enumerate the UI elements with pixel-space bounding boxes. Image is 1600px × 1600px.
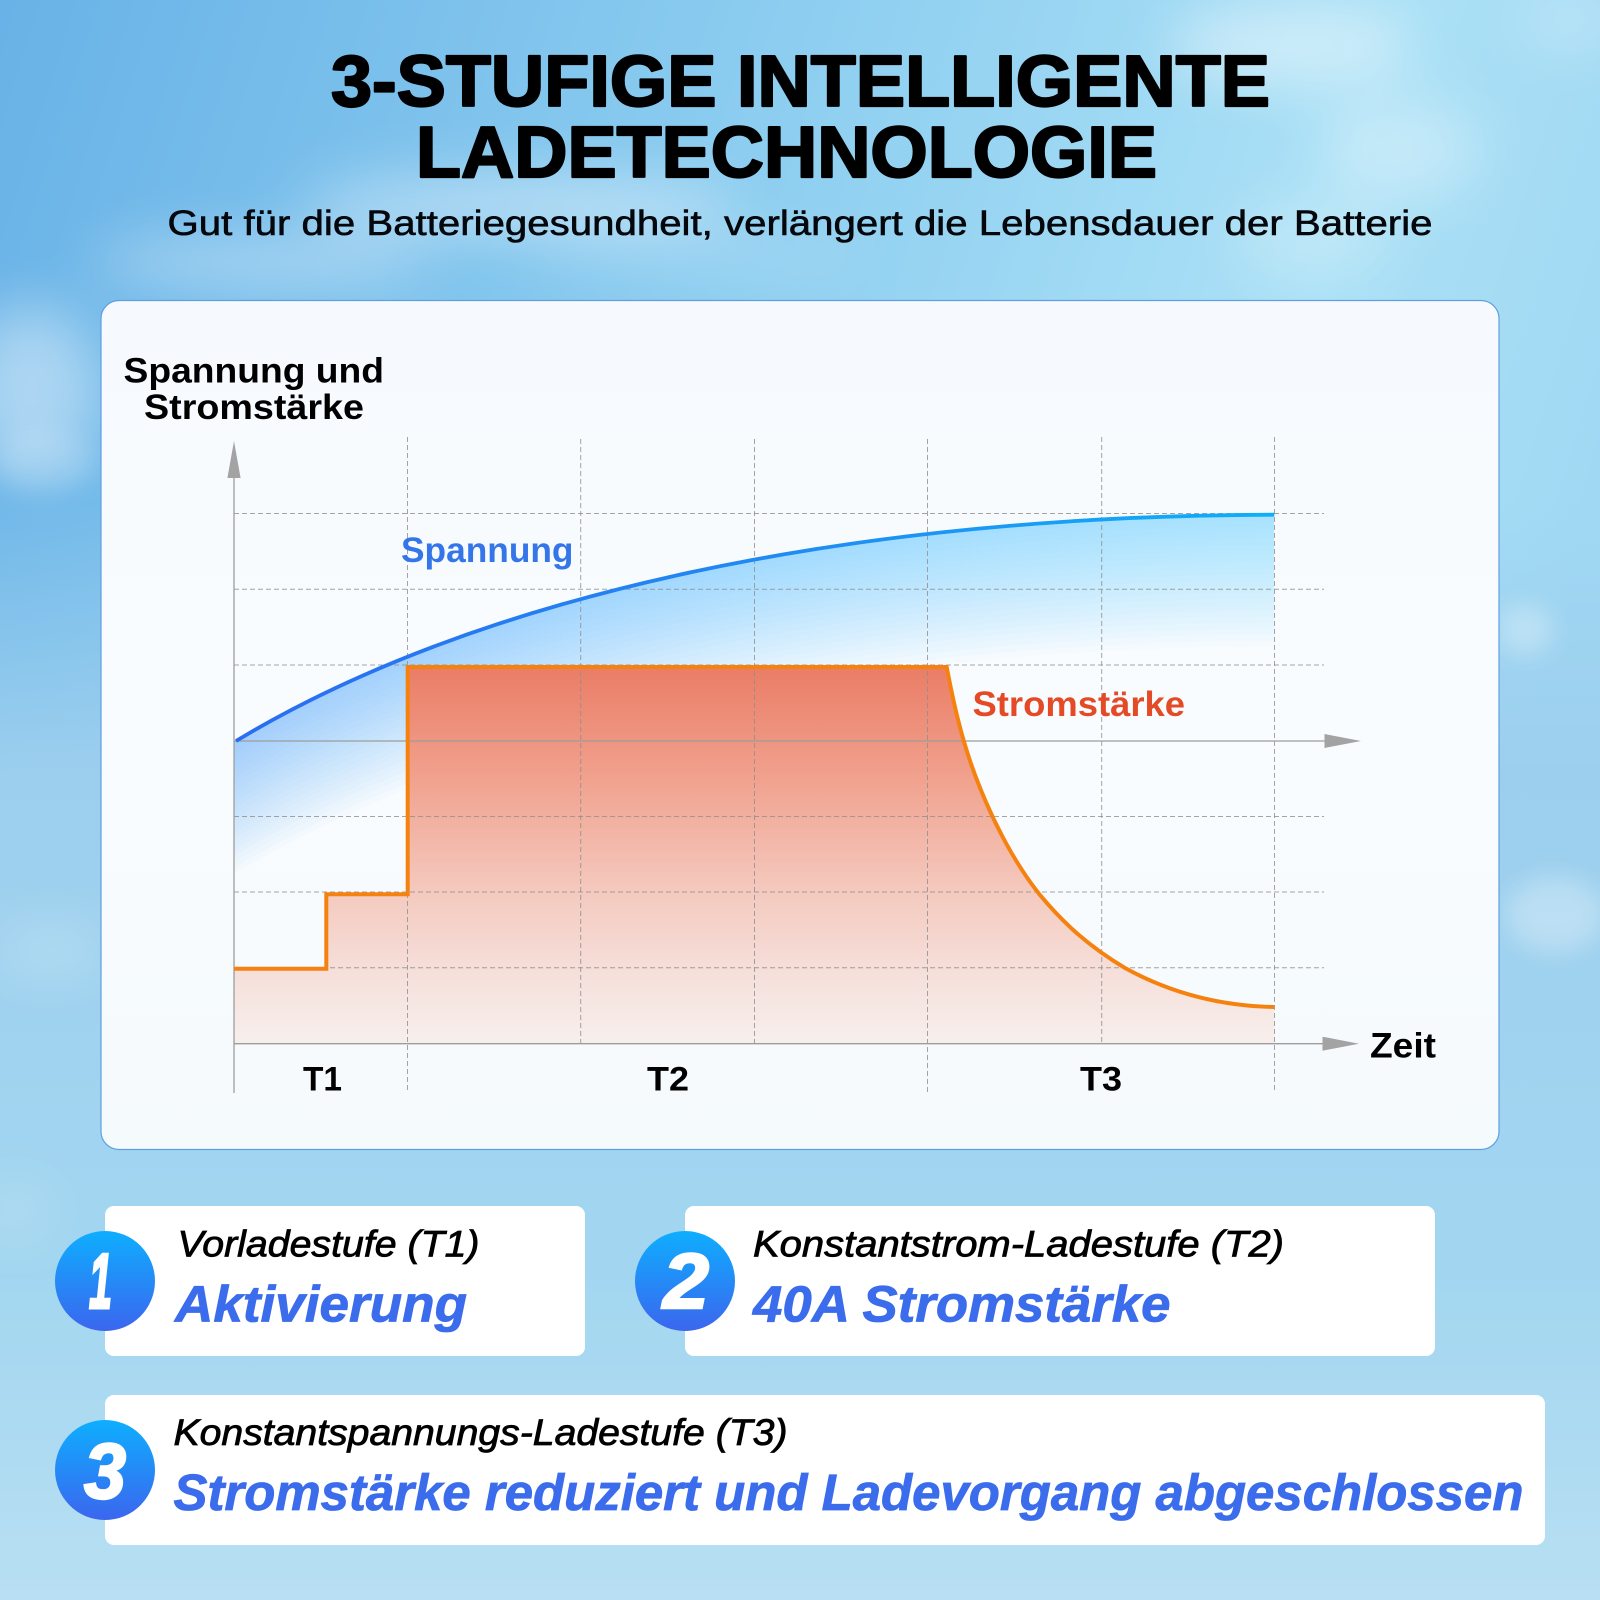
- title: 3-STUFIGE INTELLIGENTE: [331, 42, 1270, 122]
- badge 3: [55, 1420, 155, 1520]
- label: T3: T3: [1080, 1061, 1122, 1099]
- arrow: y axis: [227, 441, 241, 478]
- subtitle: Gut für die Batteriegesundheit, verlängert die Lebensdauer der Batterie: [168, 203, 1432, 243]
- y-axis title: Spannung und: [124, 352, 384, 390]
- label: T2: T2: [647, 1061, 689, 1099]
- arrow: time axis: [1322, 1037, 1359, 1051]
- title: [331, 42, 1270, 193]
- label: Zeit: Zeit: [1370, 1026, 1436, 1066]
- step 3 card: [55, 1395, 1545, 1545]
- voltage curve: [236, 515, 1274, 741]
- label: Spannung: Spannung: [401, 531, 574, 570]
- step 2 description: 40A Stromstärke: [752, 1276, 1170, 1333]
- step 3 stage name: Konstantspannungs-Ladestufe (T3): [174, 1412, 788, 1453]
- badge 3: 3: [84, 1427, 126, 1515]
- step 2 card: [635, 1206, 1435, 1356]
- y-axis title: Stromstärke: [144, 388, 364, 427]
- step 1 description: Aktivierung: [173, 1276, 467, 1333]
- step 1 card: [55, 1206, 585, 1356]
- y-axis title: [124, 352, 384, 427]
- title: LADETECHNOLOGIE: [416, 113, 1157, 193]
- grid lines: [234, 437, 1324, 1093]
- badge 1: [55, 1231, 155, 1331]
- badge 1: 1: [89, 1237, 112, 1325]
- arrow: middle axis: [1324, 734, 1361, 748]
- label: Stromstärke: Stromstärke: [972, 685, 1185, 724]
- step 2 stage name: Konstantstrom-Ladestufe (T2): [753, 1224, 1284, 1265]
- panel: chart card: [101, 300, 1499, 1150]
- label: T1: T1: [303, 1061, 342, 1099]
- step 3 description: Stromstärke reduziert und Ladevorgang abgeschlossen: [174, 1464, 1524, 1521]
- step 1 stage name: Vorladestufe (T1): [178, 1224, 480, 1265]
- badge 2: [635, 1231, 735, 1331]
- axes: [234, 470, 1330, 1093]
- current curve: [234, 667, 1274, 1007]
- voltage area fill: [234, 514, 1274, 874]
- badge 2: 2: [661, 1237, 709, 1325]
- current area fill: [234, 667, 1274, 1044]
